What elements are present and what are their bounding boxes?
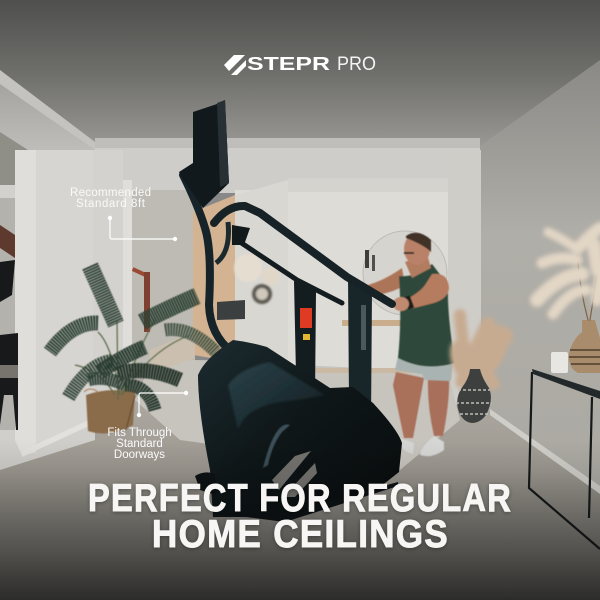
back wall header [95,148,480,193]
console table with decor [529,228,600,549]
right wall [480,60,600,492]
body side highlight [263,425,290,468]
woven vase [569,320,600,373]
right wall baseboard [490,409,600,494]
wall wreath decor [234,254,280,304]
callout text: Fits Through [107,427,172,439]
patterned floor vase [457,369,491,423]
bottom shading [0,440,600,600]
door frame [93,150,123,410]
wood wall [193,195,235,362]
headline [88,477,512,556]
stair opening wall [130,190,195,365]
sneakers [399,438,414,454]
headline: PERFECT FOR REGULAR [88,477,512,520]
rail bracket [232,225,250,245]
stepper logo mark [272,451,317,497]
callout text: Standard [116,438,163,450]
right upright [348,276,372,420]
callout text: Doorways [114,449,165,461]
callout text: Standard 8ft [76,198,146,210]
floor carpet [0,360,600,600]
display screen [179,100,229,208]
table legs and frame [529,372,600,549]
legs [393,372,424,438]
yellow label [303,334,310,340]
rail loop [216,222,228,263]
far left room [0,132,28,185]
machine logo text [361,305,366,350]
logo pro: PRO [337,54,376,75]
callout text: Recommended [70,187,151,199]
logo icon [224,55,246,75]
left upright [294,281,316,395]
upper handrail [214,206,392,304]
stepper machine [179,100,402,522]
vertical post [183,175,232,352]
back arm [368,268,405,296]
fronds [90,266,116,324]
machine body [198,340,402,517]
callout leader line [139,393,186,415]
table top [532,369,600,399]
left wall [0,82,95,470]
callout: recommended ceiling height [70,187,177,241]
callout: doorways [107,391,188,461]
logo [224,53,376,75]
logo wordmark: STEPR [247,53,330,74]
potted palm plant [50,266,216,433]
ceiling [0,0,600,150]
red knob [236,234,240,240]
stairs [150,338,195,367]
left pillar [36,150,93,450]
mirror and shelf [342,231,447,326]
red safety label [300,308,312,328]
pampas stems and plumes [537,228,600,320]
tank top [398,264,455,367]
callout leader line [110,218,175,239]
shorts [395,356,453,381]
lower rail [237,240,342,303]
inner floor [135,360,460,470]
head and neck [405,254,431,278]
tablet holder [217,300,245,320]
inner wall section [235,180,288,372]
back crown moulding [95,138,480,148]
floor vase with pampas [456,315,503,423]
left crown moulding [0,70,95,150]
front arm [407,274,449,309]
white candle [551,352,568,373]
stems [75,320,190,400]
headline: HOME CEILINGS [152,513,449,556]
man using stepper [368,233,455,456]
dark chair [0,260,18,430]
far wall [235,190,448,370]
body top panel [228,362,325,430]
basket [86,390,135,433]
right door pillar [448,150,481,405]
base foot [195,472,398,522]
